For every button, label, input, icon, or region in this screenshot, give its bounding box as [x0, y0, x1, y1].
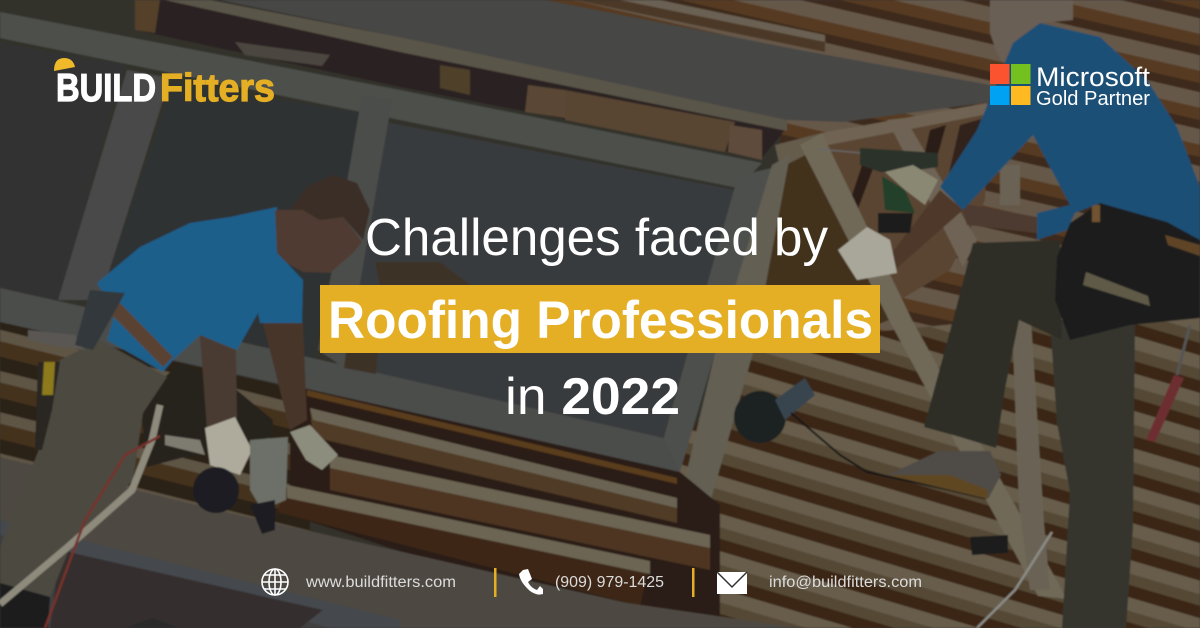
left worker	[140, 363, 273, 467]
icon: phone	[519, 569, 543, 595]
email: info@buildfitters.com	[769, 574, 922, 591]
title line 3: in 2022	[505, 368, 680, 426]
slat 1	[310, 410, 677, 523]
title highlight box	[320, 285, 880, 353]
Microsoft wordmark: Microsoft	[1036, 62, 1151, 92]
upper rafter	[822, 103, 988, 146]
icon: envelope	[717, 572, 747, 594]
upper right roof slats	[545, 0, 1200, 360]
weathered slat edge above panel	[575, 0, 825, 52]
logo word BUILD: BUILD	[56, 67, 156, 110]
brown area beside post	[740, 145, 889, 352]
Microsoft Gold Partner badge	[990, 62, 1151, 110]
sheathing behind drill	[822, 105, 988, 300]
footer contact bar	[262, 568, 922, 597]
phone number: (909) 979-1425	[555, 574, 664, 591]
under sill slats	[290, 385, 720, 625]
left slats	[0, 322, 310, 540]
window glass	[0, 43, 125, 300]
logo helmet icon	[54, 58, 75, 71]
vertical board	[1000, 165, 1020, 205]
roof panel	[220, 0, 990, 122]
upper board	[165, 0, 787, 131]
slat 2	[330, 457, 710, 570]
Microsoft logo squares	[990, 64, 1030, 105]
fascia	[0, 457, 800, 628]
window post	[680, 155, 790, 503]
divider	[494, 568, 496, 597]
diagonal board	[800, 133, 1067, 599]
slat 3	[277, 487, 650, 606]
title	[320, 209, 880, 426]
shingles	[50, 550, 323, 628]
window reflection	[344, 350, 378, 374]
logo: BUILDFitters	[54, 58, 275, 110]
title line 1: Challenges faced by	[365, 209, 828, 267]
website: www.buildfitters.com	[305, 574, 456, 591]
lower right roof slats	[620, 300, 1200, 628]
divider	[692, 568, 694, 597]
compressor on roof	[734, 378, 988, 499]
gap beneath roof panel	[135, 0, 785, 158]
window frame	[0, 12, 762, 188]
title line 2: Roofing Professionals	[328, 291, 873, 350]
icon: globe	[262, 569, 288, 595]
right worker	[1050, 320, 1135, 628]
Gold Partner wordmark: Gold Partner	[1036, 88, 1150, 110]
logo word Fitters: Fitters	[160, 67, 275, 110]
